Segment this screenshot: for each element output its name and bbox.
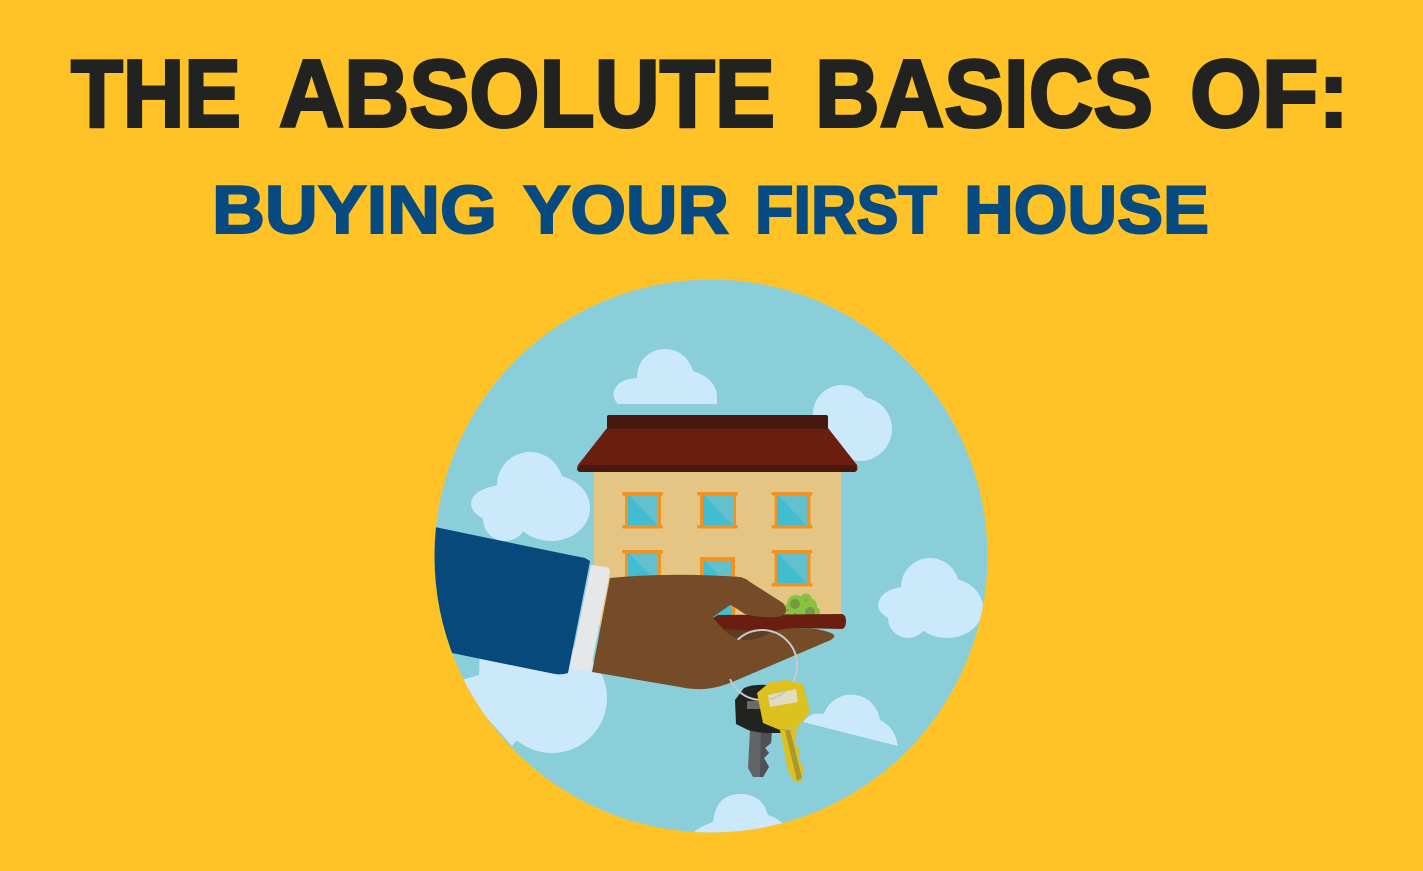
- black key marking: [747, 701, 760, 709]
- key ring: [729, 629, 798, 701]
- cloud: lower right: [803, 695, 898, 746]
- thumb: [730, 576, 786, 618]
- window row 1, left: [622, 492, 663, 528]
- roof eave shadow: [578, 465, 857, 472]
- wall: [594, 470, 841, 625]
- title: ABSOLUTE: [279, 40, 775, 148]
- cloud: behind roof: [813, 385, 892, 461]
- illustration: house and keys in a sky circle: [425, 279, 988, 840]
- door: [700, 557, 735, 620]
- sleeve: [425, 525, 590, 674]
- title: OF:: [1190, 40, 1349, 148]
- subtitle: [212, 172, 1209, 248]
- roof cap: [607, 415, 828, 429]
- house: [425, 415, 858, 782]
- black key head: [735, 685, 785, 733]
- window row 2, left: [622, 550, 663, 577]
- window row 2, right: [772, 550, 812, 586]
- palm and fingers: [592, 575, 834, 689]
- cloud: left: [471, 452, 590, 541]
- yellow key head: [757, 680, 810, 730]
- palm shadow: [723, 629, 772, 640]
- sky circle: [434, 279, 988, 833]
- infographic canvas: [70, 58, 1342, 832]
- cloud: below sleeve: [455, 643, 607, 753]
- yellow key hole: [768, 689, 798, 707]
- subtitle: FIRST: [755, 172, 937, 248]
- title: BASICS: [815, 40, 1153, 148]
- cloud: bottom: [694, 794, 782, 832]
- title: [71, 40, 1349, 148]
- cloud: right: [878, 558, 983, 638]
- hand: [592, 575, 846, 689]
- window row 1, right: [772, 492, 812, 528]
- shirt cuff: [570, 565, 610, 672]
- title: THE: [71, 40, 241, 148]
- subtitle: BUYING: [212, 172, 497, 248]
- window row 1, middle: [697, 492, 738, 528]
- bush: [784, 594, 820, 614]
- subtitle: HOUSE: [964, 172, 1209, 248]
- yellow key: [757, 680, 810, 782]
- yellow key blade: [780, 728, 803, 782]
- black key: [735, 685, 785, 777]
- subtitle: YOUR: [523, 172, 729, 248]
- clouds: [455, 349, 983, 840]
- windows: [622, 492, 820, 620]
- tray under the house: [713, 614, 846, 632]
- roof: [577, 428, 858, 472]
- cloud: top: [614, 349, 717, 404]
- black key blade: [748, 730, 772, 777]
- ring through the key hole: [727, 630, 797, 700]
